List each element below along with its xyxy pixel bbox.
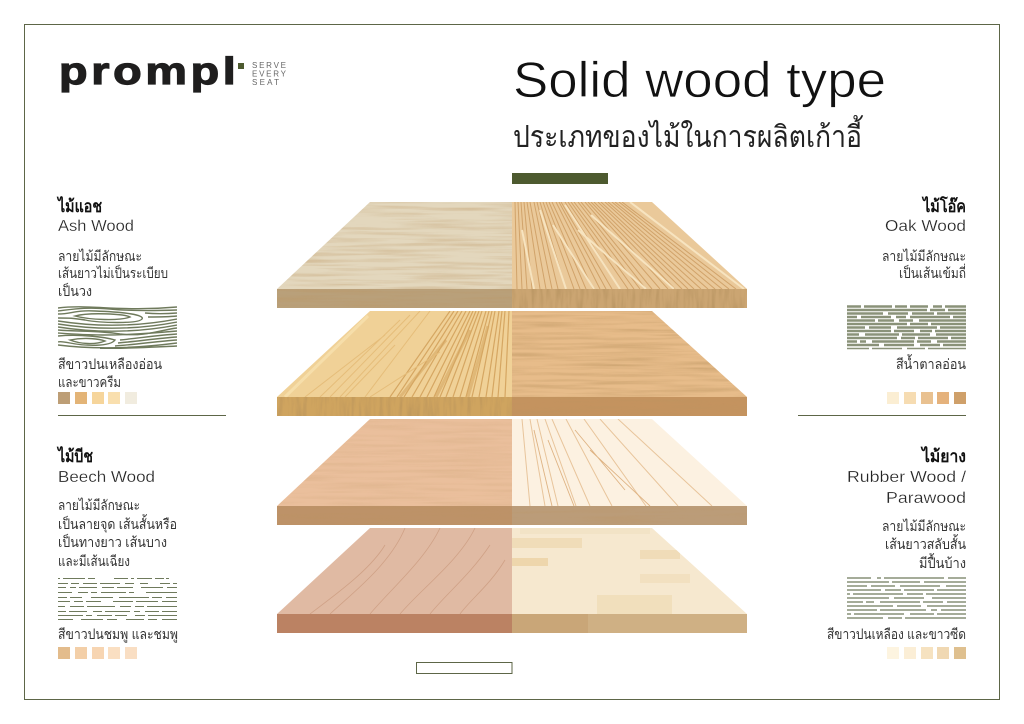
- description: beech wood: และมีเส้นเฉียง: [58, 553, 130, 569]
- panel: wood slabs: [277, 202, 747, 633]
- description: oak wood: ลายไม้มีลักษณะ: [882, 248, 966, 264]
- logo: prompl: prompl: [59, 50, 239, 93]
- pattern: beech grain: [58, 578, 177, 620]
- panel: rubber wood: [827, 446, 967, 659]
- pattern: oak grain: [847, 306, 966, 348]
- description: oak wood: [882, 248, 966, 281]
- bottom outline box: [416, 662, 512, 674]
- divider right: [798, 415, 966, 416]
- color label: rubber wood: สีขาวปนเหลือง และขาวซีด: [827, 626, 966, 642]
- subtitle: ประเภทของไม้ในการผลิตเก้าอี้: [513, 115, 863, 154]
- description: ash wood: ลายไม้มีลักษณะ: [58, 248, 142, 264]
- color label: beech wood: สีขาวปนชมพู และชมพู: [58, 626, 178, 643]
- name: beech wood: Beech Wood: [58, 469, 155, 486]
- swatches: oak wood: [887, 392, 966, 404]
- heading: rubber wood: ไม้ยาง: [920, 446, 966, 466]
- description: rubber wood: [882, 518, 966, 571]
- description: beech wood: เป็นทางยาว เส้นบาง: [58, 533, 167, 550]
- pattern: rubber grain: [847, 578, 966, 618]
- color label: ash wood: สีขาวปนเหลืองอ่อน: [58, 356, 162, 372]
- description: rubber wood: ลายไม้มีลักษณะ: [882, 518, 966, 534]
- divider left: [58, 415, 226, 416]
- panel: ash wood: [56, 196, 177, 404]
- slab 2: ash yellow and oak: [277, 311, 747, 416]
- heading: oak wood: ไม้โอ๊ค: [921, 196, 966, 216]
- description: beech wood: เป็นลายจุด เส้นสั้นหรือ: [58, 514, 177, 533]
- description: beech wood: [58, 497, 177, 569]
- description: rubber wood: มีปื้นบ้าง: [919, 553, 966, 571]
- slab 1: ash and oak: [277, 202, 747, 308]
- swatches: ash wood: [58, 392, 137, 404]
- panel: oak wood: [847, 196, 966, 404]
- name: ash wood: Ash Wood: [58, 218, 134, 235]
- name: rubber wood: Rubber Wood /: [847, 469, 967, 486]
- color label: ash wood: และขาวครีม: [58, 374, 121, 390]
- slab 3: beech and rubber: [277, 419, 747, 525]
- logo: prompl: SEAT: [252, 78, 279, 87]
- name: rubber wood: Parawood: [886, 490, 966, 507]
- heading: ash wood: ไม้แอช: [56, 196, 102, 216]
- color label: ash wood: [58, 356, 162, 390]
- heading: beech wood: ไม้บีช: [56, 446, 93, 466]
- swatches: rubber wood: [887, 647, 966, 659]
- slab 4: beech pink and rubber blocks: [277, 528, 747, 633]
- pattern: ash grain: [58, 307, 177, 349]
- name: oak wood: Oak Wood: [885, 218, 966, 235]
- title: Solid wood type: [513, 52, 886, 108]
- logo: prompl: SERVE: [252, 61, 286, 70]
- description: ash wood: เป็นวง: [58, 282, 92, 299]
- description: ash wood: เส้นยาวไม่เป็นระเบียบ: [58, 264, 168, 281]
- description: oak wood: เป็นเส้นเข้มถี่: [899, 264, 966, 281]
- panel: beech wood: [56, 446, 178, 659]
- description: rubber wood: เส้นยาวสลับสั้น: [885, 534, 966, 552]
- accent bar: [512, 173, 608, 184]
- name: rubber wood: [847, 469, 967, 507]
- description: beech wood: ลายไม้มีลักษณะ: [58, 497, 140, 513]
- description: ash wood: [58, 248, 168, 299]
- color label: oak wood: สีน้ำตาลอ่อน: [896, 354, 966, 372]
- logo: prompl: EVERY: [252, 70, 287, 78]
- swatches: beech wood: [58, 647, 137, 659]
